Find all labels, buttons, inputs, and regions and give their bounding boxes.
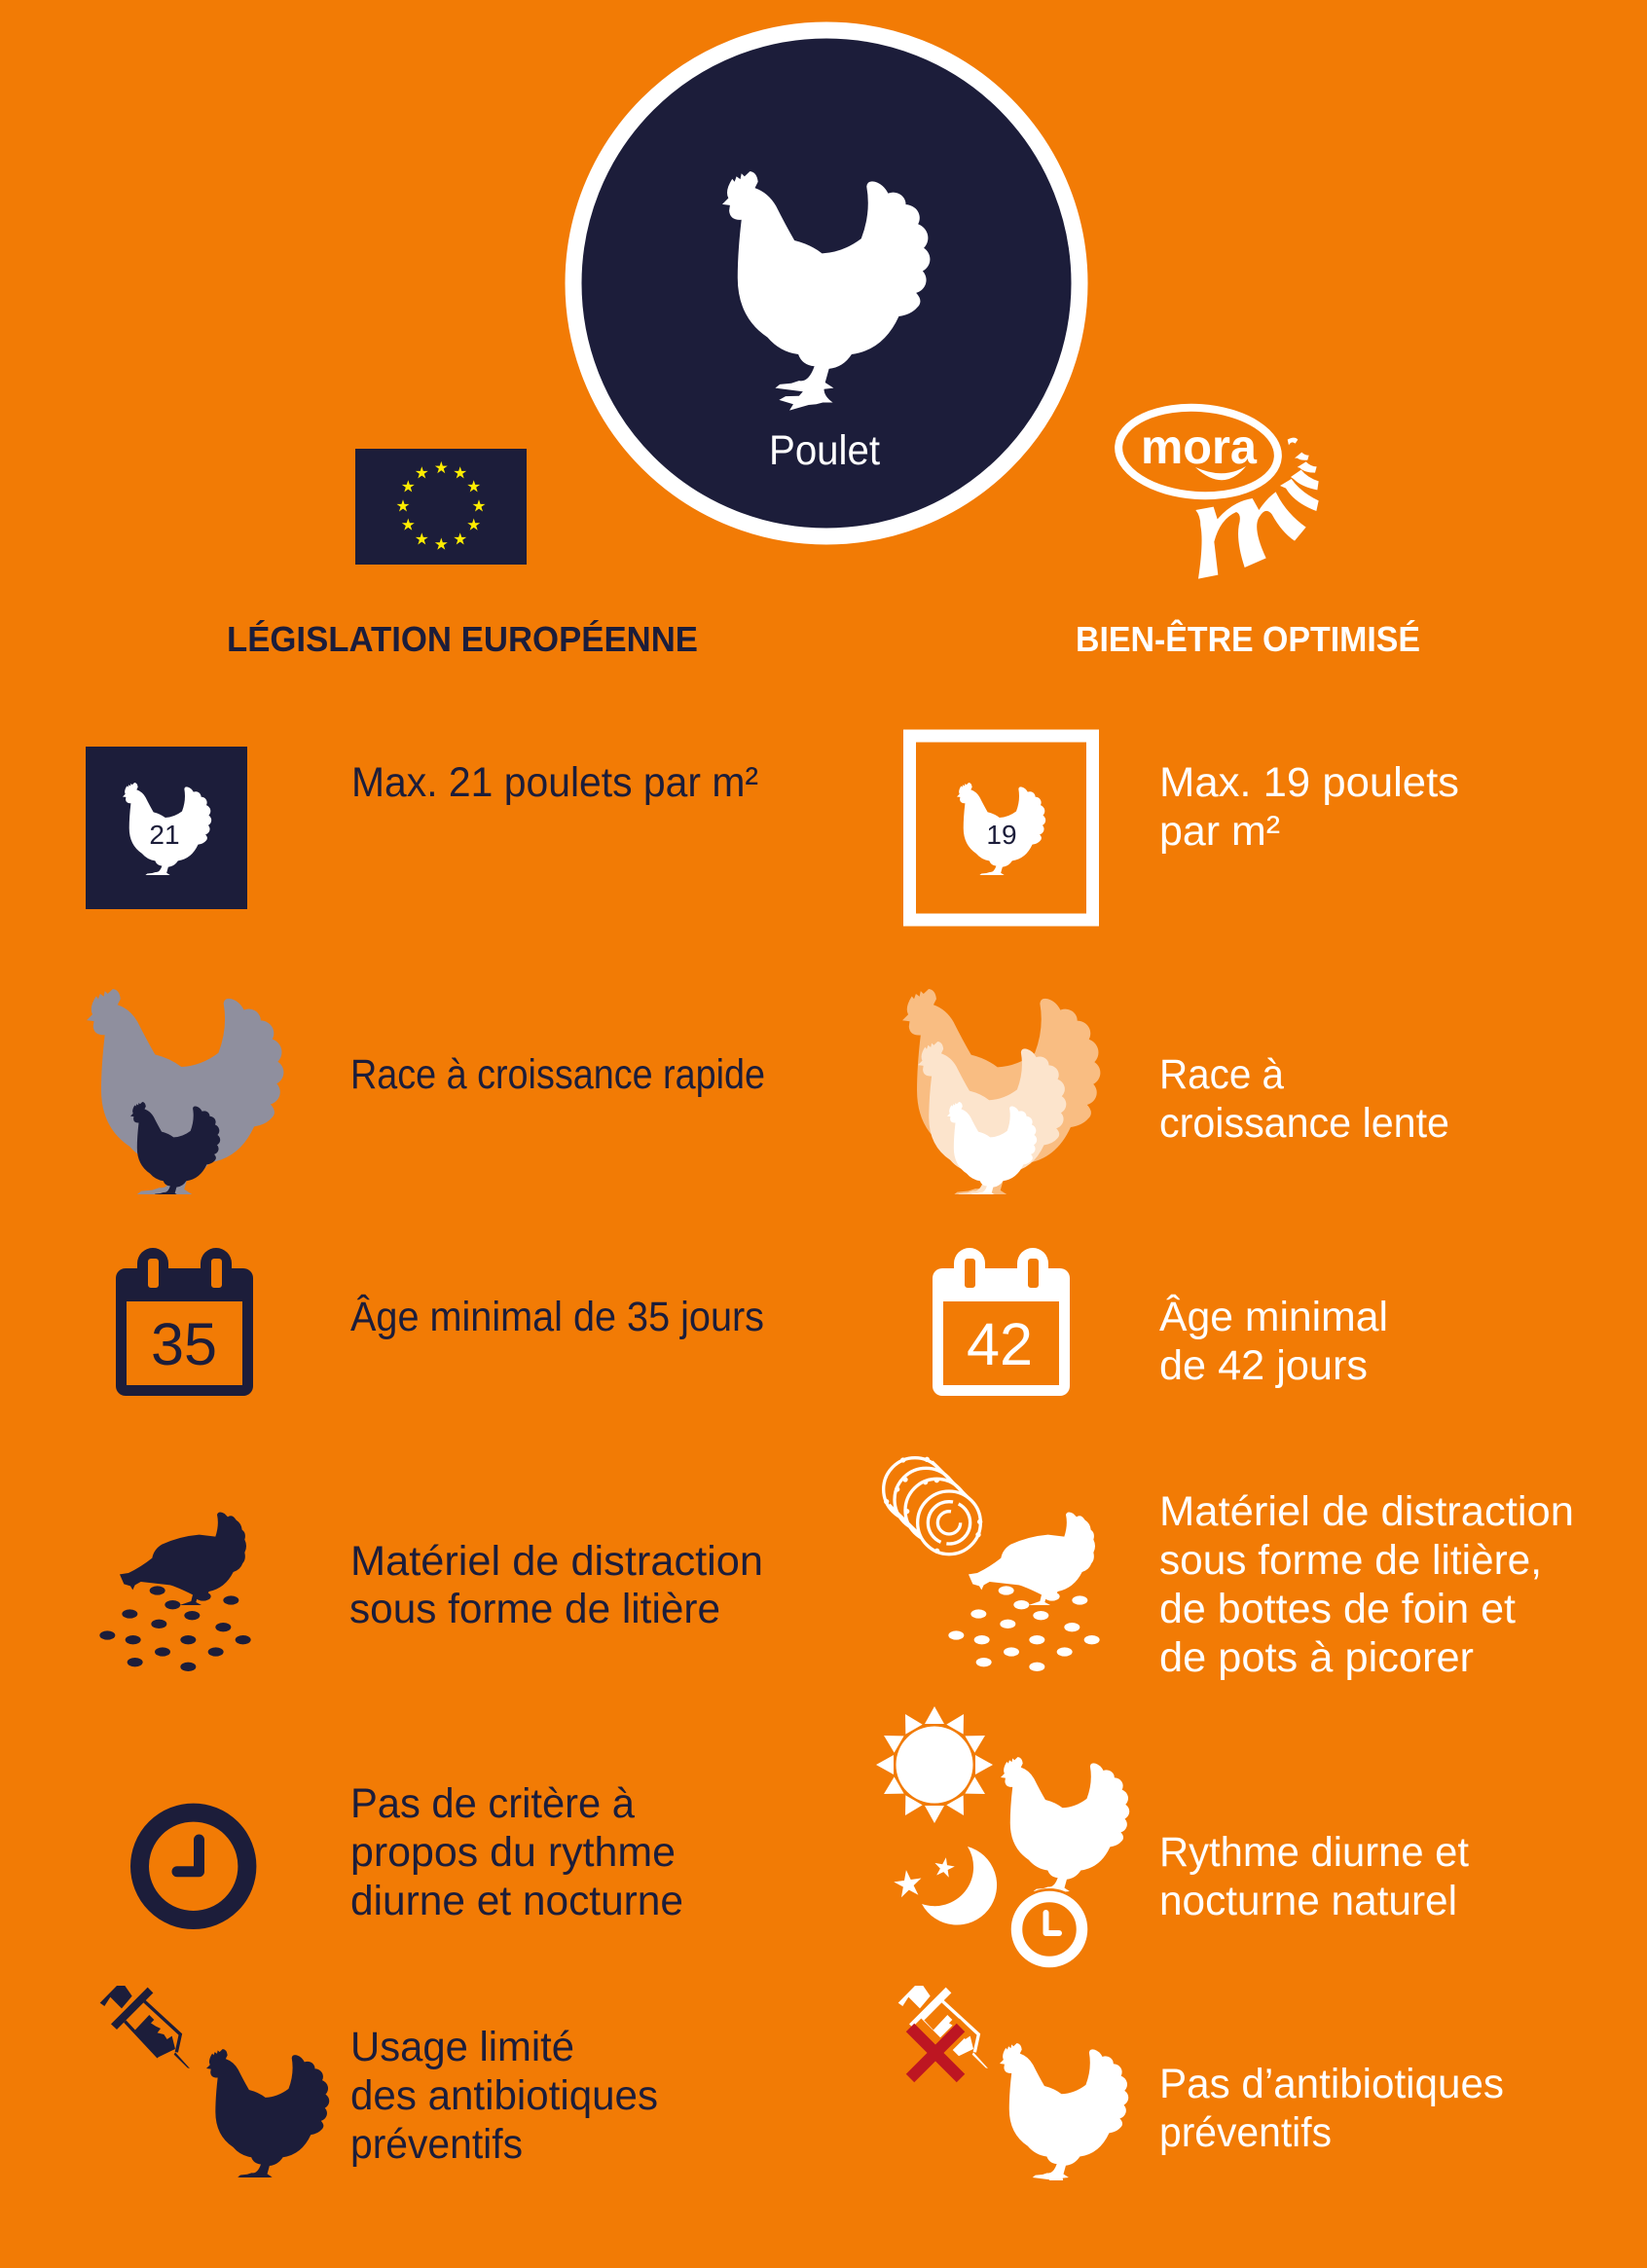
text: max 21: Max. 21 poulets par m²: [351, 759, 758, 806]
text: minimum age 42: de 42 jours: [1159, 1342, 1368, 1389]
text: slow growth: [1159, 1051, 1449, 1147]
text: limited preventive antibiotics: préventifs: [350, 2121, 523, 2168]
text: natural day-night rhythm: [1159, 1829, 1469, 1924]
logo: mora: mora: [1141, 420, 1258, 474]
icon: syringe and hen: [100, 1986, 329, 2190]
icon: moon and stars: [893, 1847, 997, 1925]
icon: calendar 42: [933, 1248, 1070, 1396]
text: limited preventive antibiotics: Usage limité: [350, 2024, 574, 2070]
text: minimum age 42: Âge minimal: [1159, 1294, 1388, 1340]
logo: mora: [1116, 402, 1319, 579]
icon: 19 chickens per square metre: [909, 736, 1092, 920]
text: limited preventive antibiotics: [350, 2024, 658, 2168]
icon: hay bale: [884, 1457, 982, 1555]
text: litter, hay and pecking pots: [1159, 1488, 1574, 1681]
icon: European Union flag: [355, 449, 527, 565]
icon: sun: [876, 1706, 993, 1823]
icon: 19 chickens per square metre: 19: [986, 820, 1017, 850]
icon: small clock: [1016, 1896, 1082, 1962]
icon: clock: [140, 1812, 247, 1920]
label: Poulet: Poulet: [769, 427, 880, 474]
icon: fast-growing breed: [87, 989, 283, 1216]
text: no day-night criterion: diurne et nocturne: [350, 1878, 683, 1924]
text: natural day-night rhythm: nocturne naturel: [1159, 1878, 1457, 1924]
icon: hen: [1001, 1757, 1129, 1905]
text: no preventive antibiotics: [1159, 2061, 1504, 2156]
icon: pecking hen: [948, 1513, 1100, 1671]
text: natural day-night rhythm: Rythme diurne et: [1159, 1829, 1469, 1876]
text: litter distraction: Matériel de distraction: [350, 1538, 763, 1585]
icon: hen pecking litter: [99, 1513, 251, 1671]
central badge: Poulet: [573, 30, 1080, 536]
text: litter distraction: [349, 1538, 763, 1632]
text: no day-night criterion: propos du rythme: [350, 1829, 676, 1876]
text: no day-night criterion: [350, 1780, 683, 1924]
icon: red cross: [910, 2025, 966, 2078]
text: no preventive antibiotics: Pas d’antibiotiques: [1159, 2061, 1504, 2107]
icon: hay bale and pecking hen: [884, 1457, 1100, 1671]
icon: sun, moon, hen and clock: [876, 1706, 1129, 1962]
text: slow growth: croissance lente: [1159, 1100, 1449, 1147]
text: litter, hay and pecking pots: de bottes de foin et: [1159, 1586, 1516, 1632]
text: max 19: Max. 19 poulets: [1159, 759, 1459, 806]
icon: crossed-out syringe and hen: [898, 1986, 1128, 2191]
text: minimum age 42: [1159, 1294, 1388, 1389]
icon: hen: [206, 2049, 329, 2190]
text: max 19: [1159, 759, 1459, 855]
text: max 19: par m²: [1159, 808, 1280, 855]
heading: Législation européenne: LÉGISLATION EUROPÉENNE: [227, 619, 698, 659]
text: fast growth: Race à croissance rapide: [350, 1051, 765, 1098]
icon: slow-growing breed: [902, 989, 1100, 1217]
text: no preventive antibiotics: préventifs: [1159, 2109, 1332, 2156]
heading: Bien-être optimisé: BIEN-ÊTRE OPTIMISÉ: [1076, 618, 1420, 659]
icon: syringe: [898, 1986, 988, 2068]
icon: 21 chickens per square metre: [86, 747, 247, 909]
text: slow growth: Race à: [1159, 1051, 1284, 1098]
text: no day-night criterion: Pas de critère à: [350, 1780, 635, 1827]
text: minimum age 35: Âge minimal de 35 jours: [350, 1294, 764, 1340]
icon: calendar 42: 42: [967, 1311, 1033, 1377]
text: litter, hay and pecking pots: sous forme de litière,: [1159, 1537, 1542, 1584]
icon: calendar 35: [116, 1248, 253, 1396]
text: litter distraction: sous forme de litière: [349, 1586, 720, 1632]
text: limited preventive antibiotics: des antibiotiques: [350, 2072, 658, 2119]
text: litter, hay and pecking pots: de pots à picorer: [1159, 1634, 1474, 1681]
icon: syringe: [100, 1986, 190, 2068]
text: litter, hay and pecking pots: Matériel de distraction: [1159, 1488, 1574, 1535]
icon: white chicken: [722, 171, 930, 411]
icon: hen: [1000, 2043, 1128, 2191]
icon: 21 chickens per square metre: 21: [149, 820, 180, 850]
icon: calendar 35: 35: [151, 1311, 217, 1377]
